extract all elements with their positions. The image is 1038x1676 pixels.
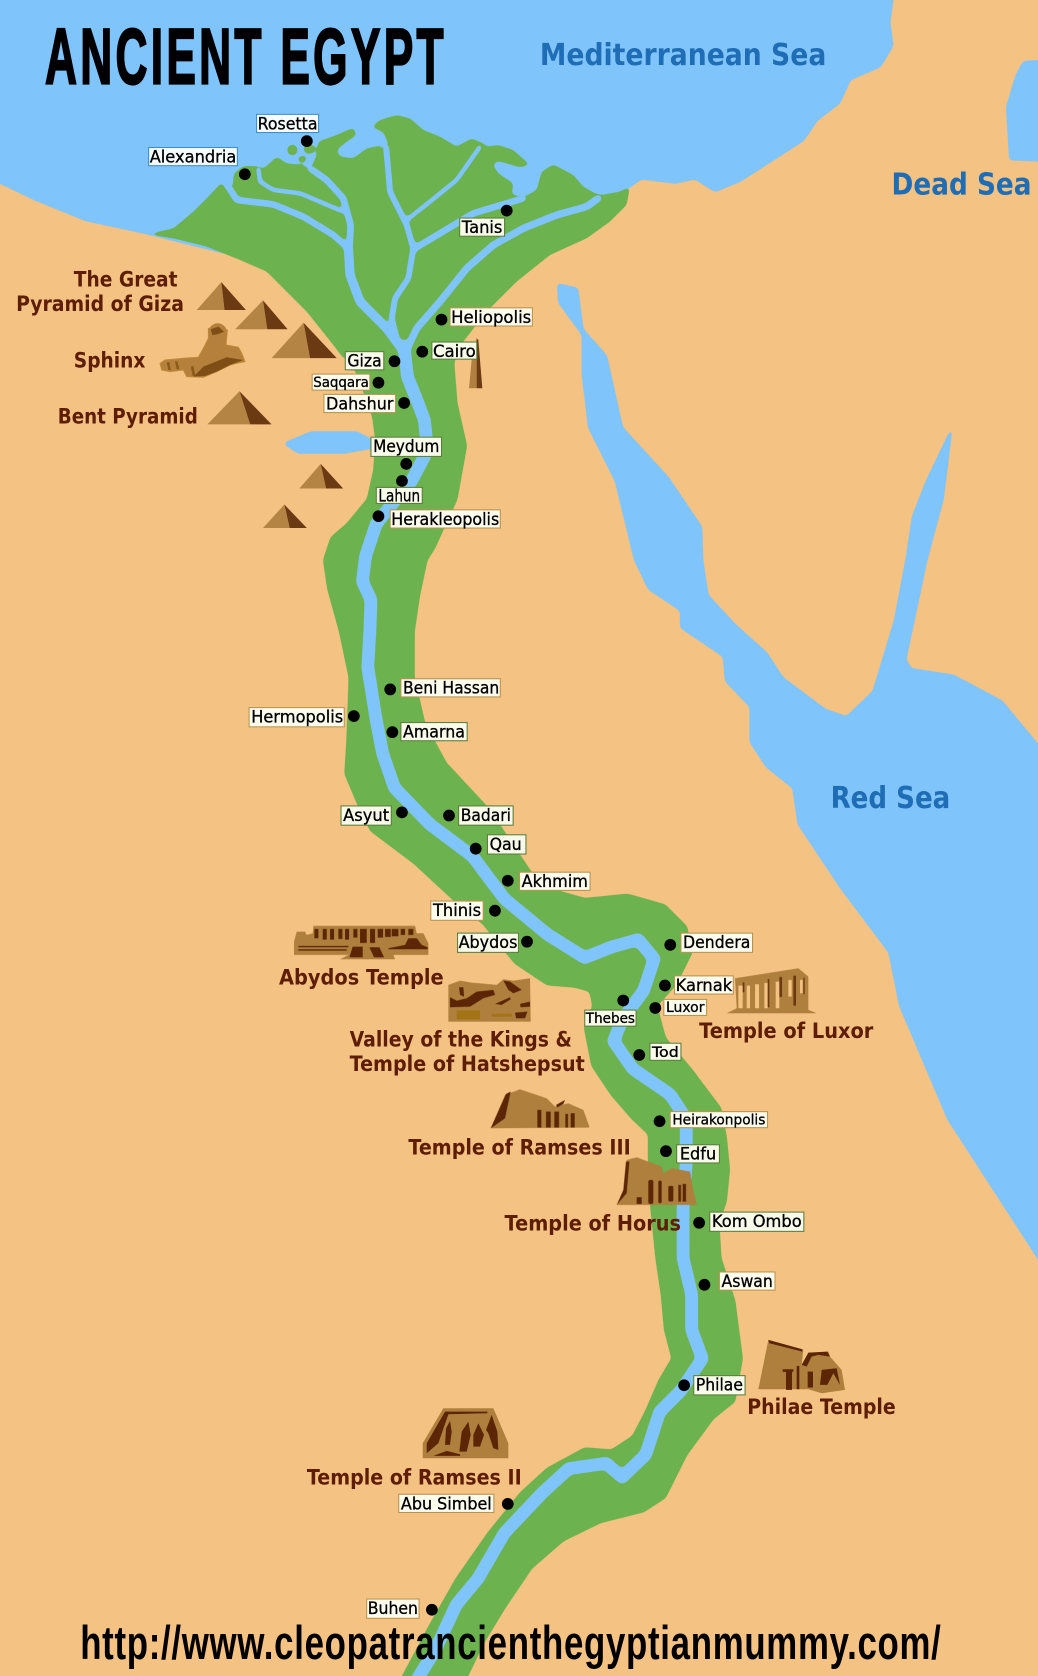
place: Thebes [585, 995, 636, 1027]
place: Aswan: Aswan [722, 1272, 773, 1292]
place: Kom Ombo: Kom Ombo [712, 1212, 802, 1232]
place: Tanis [460, 205, 513, 238]
place: Lahun [376, 475, 422, 506]
place: Abu Simbel: Abu Simbel [401, 1494, 492, 1514]
icon: pyramid 2 [235, 300, 288, 329]
place: Lahun: Lahun [378, 486, 420, 506]
place: Abydos: Abydos [459, 933, 517, 953]
place: Hermopolis: Hermopolis [251, 708, 343, 728]
place: Luxor: Luxor [666, 1000, 705, 1016]
heading: Valley of the Kings and Temple of Hatshepsut: Valley of the Kings & [350, 1027, 572, 1052]
website URL: http://www.cleopatrancienthegyptianmummy.com/ [80, 1617, 941, 1669]
Nile valley and delta: fertile land [147, 115, 742, 1676]
icon: small pyramid 6 [263, 505, 307, 528]
place: Heirakonpolis: Heirakonpolis [672, 1112, 765, 1128]
place: Tod: Tod [651, 1045, 679, 1061]
place: Dahshur: Dahshur [326, 394, 394, 414]
place: Herakleopolis: Herakleopolis [391, 510, 499, 530]
heading: Valley of the Kings and Temple of Hatshepsut [350, 1027, 585, 1077]
heading: Bent Pyramid: Bent Pyramid [58, 404, 198, 429]
place: Giza [345, 352, 400, 372]
place: Qau [470, 835, 526, 855]
place: Aswan [699, 1272, 775, 1292]
place: Heliopolis: Heliopolis [451, 308, 531, 328]
icon: pyramid 1 [197, 282, 246, 310]
place: Alexandria [149, 147, 251, 180]
place: Edfu [660, 1145, 719, 1165]
place: Akhmim: Akhmim [522, 872, 588, 892]
heading: Red Sea: Red Sea [831, 781, 950, 816]
place: Giza: Giza [347, 352, 382, 372]
place: Asyut: Asyut [343, 806, 389, 826]
place: Dendera: Dendera [683, 933, 750, 953]
place: Alexandria: Alexandria [150, 147, 236, 167]
icon: Philae temple [758, 1340, 845, 1393]
place: Thinis: Thinis [432, 901, 481, 921]
heading: Temple of Ramses II: Temple of Ramses II [307, 1466, 522, 1491]
icon: Valley of the Kings [448, 978, 531, 1022]
heading: Abydos Temple: Abydos Temple [279, 965, 444, 990]
icon: sphinx [160, 323, 245, 377]
place: Edfu: Edfu [680, 1145, 716, 1165]
place: Rosetta: Rosetta [258, 114, 318, 134]
icon: Temple of Luxor [727, 968, 817, 1013]
place: Badari: Badari [461, 806, 511, 826]
place: Karnak: Karnak [676, 976, 732, 996]
Dead Sea [1006, 59, 1038, 162]
heading: Valley of the Kings and Temple of Hatshepsut: Temple of Hatshepsut [350, 1052, 585, 1077]
heading: Temple of Ramses III: Temple of Ramses III [408, 1135, 631, 1160]
icon: small pyramid 5 [299, 464, 343, 488]
place: Tod [633, 1043, 681, 1061]
heading: The Great Pyramid of Giza: Pyramid of Giza [16, 292, 184, 317]
icon: Temple of Horus [617, 1157, 697, 1205]
Red Sea with gulfs [558, 284, 1038, 1289]
heading: The Great Pyramid of Giza [16, 267, 184, 317]
icon: Abydos temple [294, 926, 428, 959]
heading: Temple of Luxor: Temple of Luxor [699, 1019, 874, 1044]
place: Qau: Qau [490, 835, 522, 855]
river Nile and delta channels [227, 147, 702, 1676]
heading: The Great Pyramid of Giza: The Great [74, 267, 177, 292]
heading: Sphinx: Sphinx [74, 349, 146, 374]
heading: Temple of Horus: Temple of Horus [505, 1211, 681, 1236]
icon: Temple of Ramses III [491, 1089, 589, 1128]
place: Buhen: Buhen [368, 1599, 418, 1619]
title: ANCIENT EGYPT [45, 12, 444, 101]
place: Thebes: Thebes [585, 1011, 635, 1027]
place: Cairo: Cairo [433, 342, 476, 362]
icon: bent pyramid [207, 391, 272, 424]
icon: pyramid 3 [272, 323, 337, 358]
place: Meydum: Meydum [373, 437, 439, 457]
icon: Temple of Ramses II [423, 1408, 508, 1458]
Lake Moeris [285, 433, 381, 452]
place: Beni Hassan: Beni Hassan [403, 679, 499, 699]
heading: Philae Temple: Philae Temple [747, 1395, 896, 1420]
place: Luxor [649, 999, 707, 1016]
place: Saqqara: Saqqara [313, 375, 369, 391]
place: Rosetta [257, 114, 319, 147]
heading: Mediterranean Sea: Mediterranean Sea [540, 38, 826, 73]
place: Philae: Philae [696, 1376, 743, 1396]
place: Amarna: Amarna [403, 723, 465, 743]
place: Tanis: Tanis [461, 218, 503, 238]
place: Meydum [371, 437, 442, 470]
icon: obelisk [469, 338, 482, 388]
